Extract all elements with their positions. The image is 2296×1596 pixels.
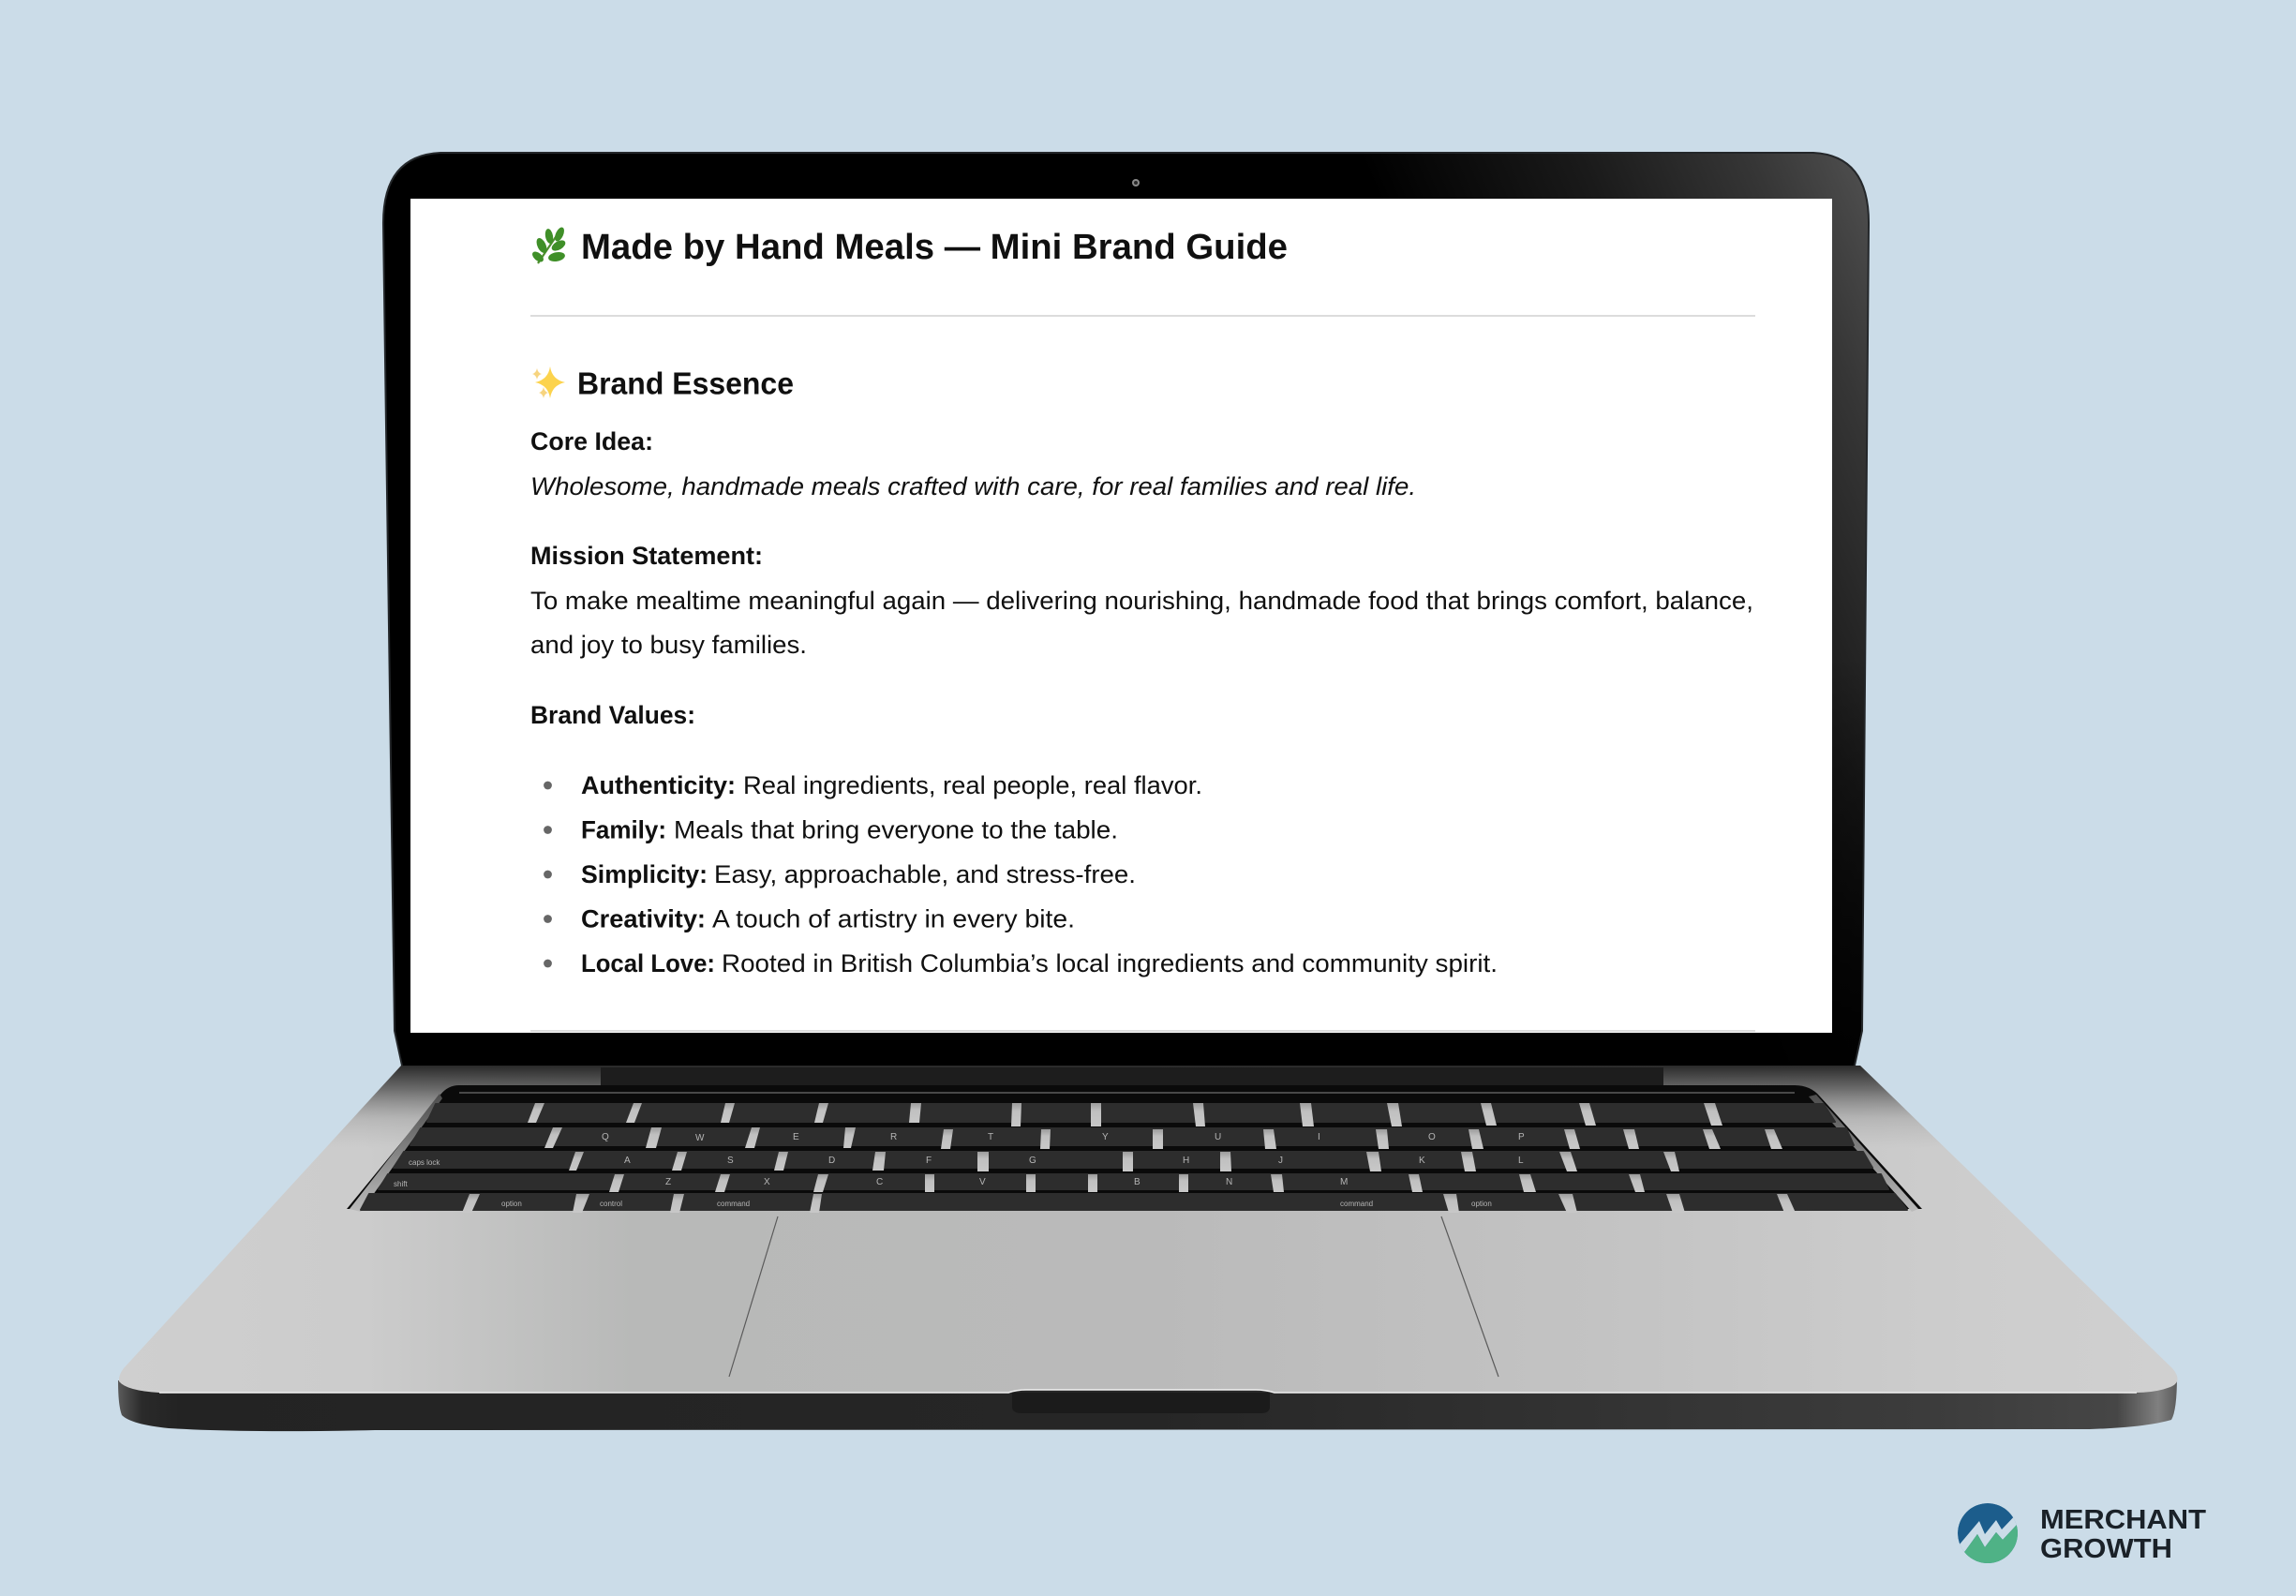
bullet: simplicity: Simplicity: bbox=[581, 860, 708, 888]
icon: herb sprig bbox=[530, 226, 567, 264]
key legends: caps lock bbox=[409, 1158, 440, 1167]
key legends: N bbox=[1226, 1177, 1232, 1187]
key legends: S bbox=[727, 1156, 734, 1166]
bullet: creativity bbox=[544, 905, 1075, 933]
key legends bbox=[394, 1132, 1525, 1208]
base front edge bbox=[118, 1376, 2177, 1431]
logo mark bbox=[1958, 1503, 2018, 1563]
icon: sparkles bbox=[532, 366, 565, 398]
key legends: V bbox=[979, 1177, 986, 1187]
key legends: A bbox=[624, 1156, 631, 1166]
well highlight bbox=[459, 1092, 1795, 1094]
base notch bbox=[1012, 1393, 1270, 1413]
key legends: option bbox=[501, 1200, 522, 1208]
logo wordmark: MERCHANT bbox=[2040, 1505, 2206, 1535]
keyboard well bbox=[347, 1085, 1922, 1213]
heading: brand values: Brand Values: bbox=[530, 701, 695, 729]
key legends: C bbox=[876, 1177, 883, 1187]
key legends: P bbox=[1518, 1132, 1525, 1142]
text block: mission statement bbox=[530, 542, 1753, 659]
bullet: creativity: Creativity: bbox=[581, 905, 706, 933]
text block: core idea: Wholesome, handmade meals crafted with care, for real families and real life. bbox=[530, 472, 1416, 500]
key legends: command bbox=[1340, 1200, 1373, 1208]
bullet: local love: Rooted in British Columbia’s local ingredients and community spirit. bbox=[722, 949, 1498, 977]
key legends: L bbox=[1518, 1156, 1524, 1166]
key legends: D bbox=[828, 1156, 835, 1166]
laptop base bbox=[112, 1066, 2184, 1431]
bullet: simplicity: Easy, approachable, and stress-free. bbox=[714, 860, 1136, 888]
key legends: T bbox=[988, 1132, 993, 1142]
key legends: command bbox=[717, 1200, 750, 1208]
key legends: Y bbox=[1102, 1132, 1109, 1142]
webcam bbox=[1132, 179, 1140, 186]
bullet: authenticity: Real ingredients, real people, real flavor. bbox=[743, 771, 1202, 799]
list: brand values bbox=[544, 771, 1498, 977]
text block: core idea bbox=[530, 427, 1416, 500]
key legends: G bbox=[1029, 1156, 1036, 1166]
hinge bar bbox=[601, 1067, 1663, 1085]
laptop lid bbox=[382, 152, 1870, 1085]
well side strips bbox=[350, 1094, 442, 1212]
key legends: W bbox=[695, 1133, 705, 1143]
bullet: creativity: A touch of artistry in every bite. bbox=[712, 905, 1075, 933]
base front highlight bbox=[159, 1390, 2137, 1393]
bullet: family: Family: bbox=[581, 815, 666, 843]
key legends: K bbox=[1419, 1156, 1425, 1166]
bullet: authenticity: Authenticity: bbox=[581, 771, 736, 799]
bullet: local love: Local Love: bbox=[581, 949, 715, 977]
key legends: O bbox=[1428, 1132, 1436, 1142]
key legends: X bbox=[764, 1177, 770, 1187]
key legends: I bbox=[1318, 1132, 1320, 1142]
key legends: shift bbox=[394, 1180, 408, 1188]
bullet: family: Meals that bring everyone to the table. bbox=[674, 815, 1118, 843]
key legends: Q bbox=[602, 1132, 609, 1142]
key legends: option bbox=[1471, 1200, 1492, 1208]
keyboard rows bbox=[361, 1104, 1907, 1210]
text block: core idea: Core Idea: bbox=[530, 427, 653, 455]
key legends: R bbox=[890, 1132, 897, 1142]
key legends: U bbox=[1215, 1132, 1221, 1142]
text block: mission statement: Mission Statement: bbox=[530, 542, 763, 570]
key legends: B bbox=[1134, 1177, 1141, 1187]
text block: mission statement: To make mealtime meaningful again — delivering nourishing, handmade food that brings comfort, balance, bbox=[530, 587, 1753, 615]
title: Made by Hand Meals — Mini Brand Guide bbox=[581, 228, 1288, 267]
heading: Brand Essence: Brand Essence bbox=[577, 365, 794, 401]
logo: Merchant Growth: GROWTH bbox=[2040, 1534, 2172, 1564]
key legends: F bbox=[926, 1156, 932, 1166]
bullet: simplicity bbox=[544, 860, 1136, 888]
key legends: Z bbox=[665, 1177, 671, 1187]
screen background bbox=[410, 199, 1832, 1033]
key legends: E bbox=[793, 1132, 799, 1142]
screen bbox=[410, 199, 1832, 1033]
logo: Merchant Growth bbox=[1958, 1503, 2206, 1563]
key legends: H bbox=[1183, 1156, 1189, 1166]
key legends: M bbox=[1340, 1177, 1348, 1187]
text block: mission statement: and joy to busy families. bbox=[530, 631, 807, 659]
key legends: control bbox=[600, 1200, 622, 1208]
keyboard key gaps bbox=[462, 1103, 1796, 1213]
trackpad edges bbox=[729, 1216, 1498, 1377]
bullet: authenticity bbox=[544, 771, 1202, 799]
base deck surface bbox=[119, 1066, 2178, 1393]
key legends: J bbox=[1278, 1156, 1283, 1166]
